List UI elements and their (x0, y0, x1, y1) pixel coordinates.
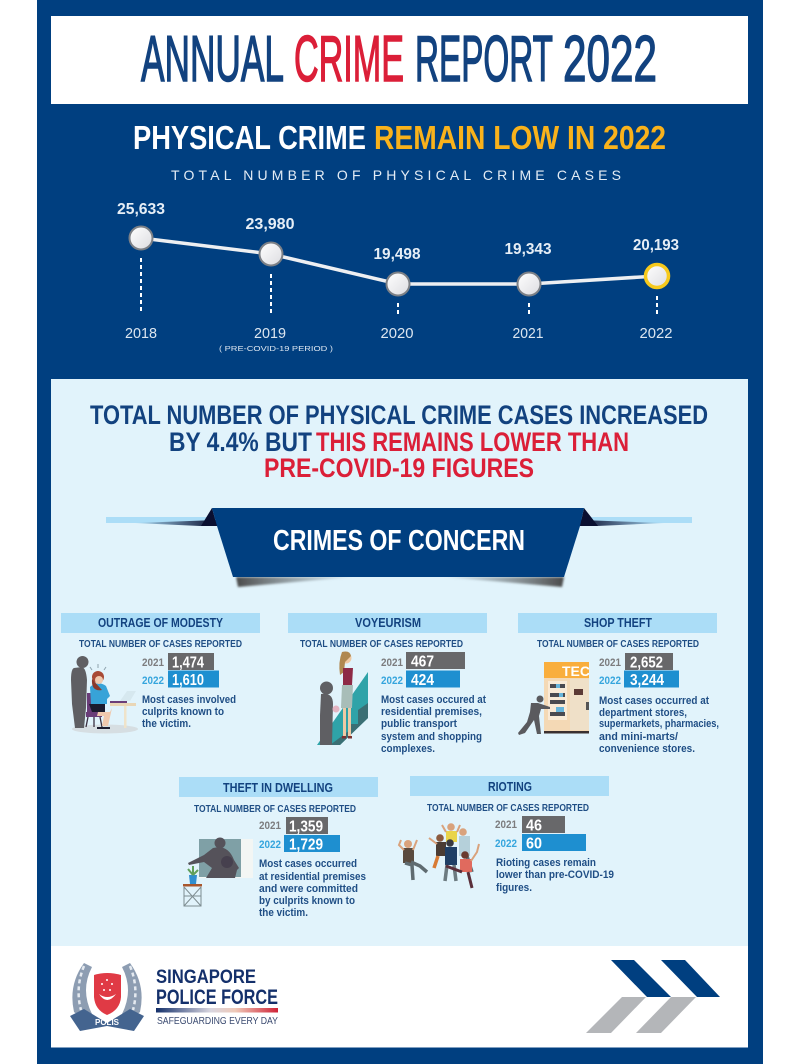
title banner: 2022 (563, 22, 657, 95)
line chart: physical crime cases 2018-2022: 2021 (512, 325, 544, 342)
panel: rioting: figures. (496, 882, 532, 894)
icon: seated woman with shadow figure (71, 656, 138, 734)
panel: voyeurism: public transport (381, 718, 457, 730)
panel: voyeurism: system and shopping (381, 731, 482, 743)
panel: theft in dwelling: TOTAL NUMBER OF CASES REPORTED (194, 803, 356, 815)
panel: shop theft (518, 613, 719, 755)
line chart: physical crime cases 2018-2022: ( PRE-COVID-19 PERIOD ) (219, 346, 333, 353)
line chart: physical crime cases 2018-2022 (117, 201, 679, 353)
panel: voyeurism: 424 (411, 672, 434, 689)
panel: outrage of modesty (61, 613, 260, 734)
panel: shop theft: and mini-marts/ (599, 731, 678, 743)
subheading: total number of physical crime cases: TOTAL NUMBER OF PHYSICAL CRIME CASES (171, 167, 621, 183)
ribbon: crimes of concern (106, 508, 692, 587)
logo text: Singapore Police Force (156, 966, 278, 1027)
panel: voyeurism: complexes. (381, 743, 435, 755)
panel: shop theft: 2022 (599, 675, 621, 687)
panel: rioting: 46 (526, 818, 542, 834)
icon: group of rioters (399, 823, 479, 888)
title banner: ANNUAL (141, 22, 284, 95)
summary headline (90, 400, 708, 483)
panel: rioting: Rioting cases remain (496, 857, 596, 869)
logo text: Singapore Police Force: POLICE FORCE (156, 986, 278, 1009)
panel: theft in dwelling: 2021 (259, 820, 281, 832)
panel: shop theft: convenience stores. (599, 743, 695, 755)
line chart: physical crime cases 2018-2022: 20,193 (633, 237, 679, 254)
icon: police crest (70, 963, 144, 1031)
panel: theft in dwelling: 1,729 (289, 836, 323, 854)
panel: outrage of modesty: 2022 (142, 675, 164, 687)
heading: physical crime remain low: REMAIN LOW IN 2022 (374, 119, 666, 156)
icon: thief at shop front: TECH (562, 663, 600, 679)
panel: outrage of modesty: 1,474 (172, 654, 204, 672)
panel: shop theft: 2,652 (630, 654, 663, 672)
panel: voyeurism: VOYEURISM (355, 615, 421, 630)
panel: outrage of modesty: Most cases involved (142, 694, 236, 706)
line chart: physical crime cases 2018-2022: 2019 (254, 325, 286, 342)
panel: shop theft: 3,244 (630, 672, 664, 689)
panel: crimes of concern background (51, 379, 748, 946)
panel: voyeurism: 2022 (381, 675, 403, 687)
panel: rioting: 2022 (495, 838, 517, 850)
ribbon: crimes of concern: CRIMES OF CONCERN (273, 525, 525, 557)
panel: shop theft: 2021 (599, 657, 621, 669)
panel: voyeurism: Most cases occured at (381, 694, 486, 706)
title banner (51, 16, 748, 104)
panel: voyeurism: residential premises, (381, 706, 482, 718)
panel: voyeurism: TOTAL NUMBER OF CASES REPORTED (300, 638, 463, 650)
panel: theft in dwelling: the victim. (259, 907, 308, 919)
icon: thief at shop front (518, 662, 589, 735)
line chart: physical crime cases 2018-2022: 19,498 (374, 246, 421, 263)
icon: burglar at window with side table (183, 838, 253, 906)
line chart: physical crime cases 2018-2022: 19,343 (504, 241, 552, 258)
icon: woman on escalator with shadow figure (317, 652, 368, 745)
panel: outrage of modesty: 1,610 (172, 672, 204, 689)
panel: outrage of modesty: OUTRAGE OF MODESTY (98, 615, 223, 630)
panel: voyeurism: 467 (411, 654, 434, 670)
panel: rioting (399, 776, 614, 894)
panel: rioting: TOTAL NUMBER OF CASES REPORTED (427, 802, 589, 814)
summary headline: THIS REMAINS LOWER THAN (316, 427, 629, 457)
panel: rioting: 60 (526, 836, 542, 852)
icon: police crest: POLIS (95, 1018, 120, 1027)
panel: voyeurism: 2021 (381, 657, 403, 669)
line chart: physical crime cases 2018-2022: 2018 (125, 325, 157, 342)
heading: physical crime remain low (133, 119, 666, 156)
panel: theft in dwelling: and were committed (259, 883, 358, 895)
line chart: physical crime cases 2018-2022: 2022 (640, 325, 672, 342)
panel: voyeurism (288, 613, 487, 755)
panel: outrage of modesty: culprits known to (142, 706, 224, 718)
panel: theft in dwelling: by culprits known to (259, 895, 355, 907)
panel: theft in dwelling: THEFT IN DWELLING (223, 780, 333, 795)
summary headline: BY 4.4% BUT (169, 427, 312, 457)
title banner: CRIME (294, 22, 404, 95)
panel: shop theft: Most cases occurred at (599, 695, 709, 707)
title banner: REPORT (415, 22, 553, 95)
panel: theft in dwelling: 2022 (259, 839, 281, 851)
panel: shop theft: supermarkets, pharmacies, (599, 718, 719, 730)
panel: theft in dwelling (179, 777, 378, 919)
panel: theft in dwelling: Most cases occurred (259, 858, 357, 870)
panel: outrage of modesty: 2021 (142, 657, 164, 669)
panel: shop theft: TOTAL NUMBER OF CASES REPORTED (537, 638, 699, 650)
footer panel (51, 946, 748, 1048)
panel: shop theft: SHOP THEFT (584, 615, 652, 630)
panel: rioting: RIOTING (488, 779, 532, 794)
panel: rioting: lower than pre-COVID-19 (496, 869, 614, 881)
panel: outrage of modesty: TOTAL NUMBER OF CASES REPORTED (79, 638, 242, 650)
panel: shop theft: department stores, (599, 707, 687, 719)
panel: outrage of modesty: the victim. (142, 718, 191, 730)
summary headline: PRE-COVID-19 FIGURES (264, 453, 534, 483)
panel: theft in dwelling: at residential premises (259, 871, 366, 883)
line chart: physical crime cases 2018-2022: 23,980 (246, 216, 294, 233)
icon: double chevrons (586, 960, 720, 1033)
line chart: physical crime cases 2018-2022: 2020 (380, 325, 414, 342)
logo text: Singapore Police Force: SAFEGUARDING EVERY DAY (157, 1016, 278, 1027)
logo text: Singapore Police Force: SINGAPORE (156, 966, 256, 988)
panel: rioting: 2021 (495, 819, 517, 831)
heading: physical crime remain low: PHYSICAL CRIME (133, 119, 366, 156)
panel: theft in dwelling: 1,359 (289, 818, 323, 836)
line chart: physical crime cases 2018-2022: 25,633 (117, 201, 165, 218)
